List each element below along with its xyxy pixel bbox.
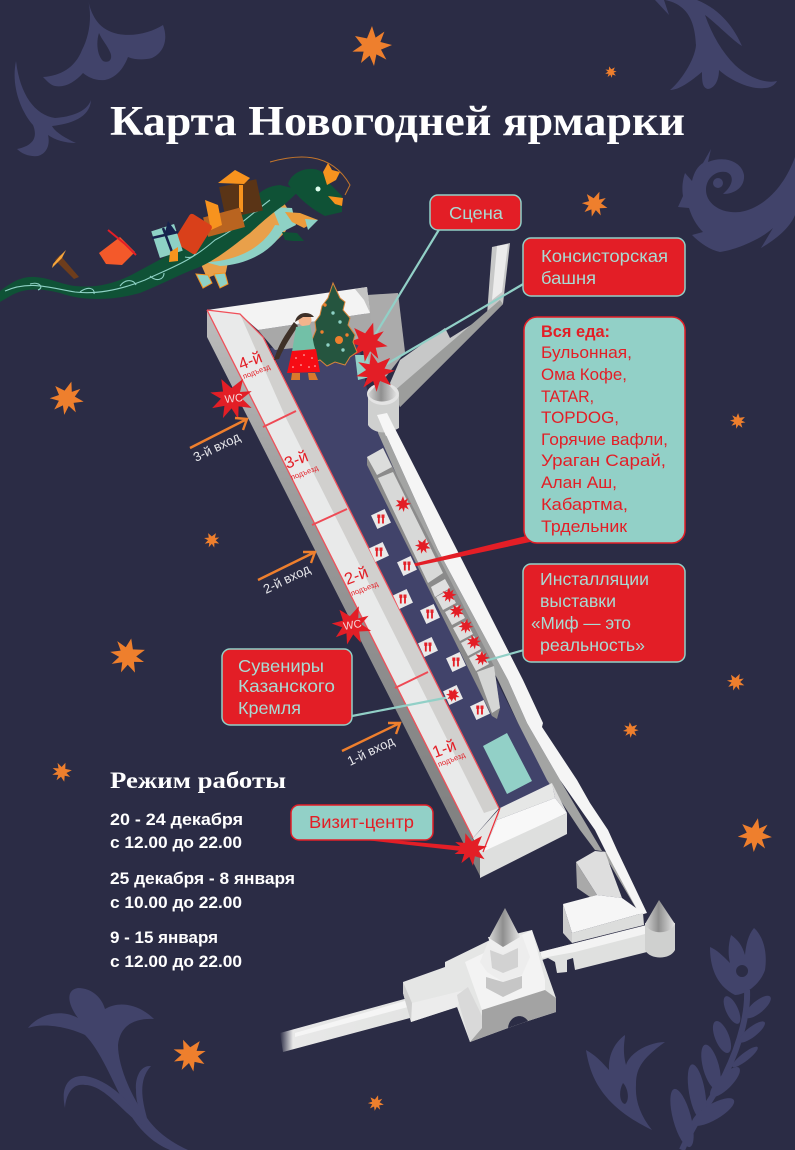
opening hours: 20 - 24 декабря (110, 811, 243, 829)
callout: installations: «Миф — это (531, 613, 631, 633)
gallery entrance labels: 1-й (430, 736, 459, 762)
gallery entrance labels: подъезд (349, 579, 380, 598)
callout: all food: Трдельник (541, 517, 628, 536)
gifts on dragon's back (151, 170, 263, 262)
south wall (540, 925, 647, 973)
food tiles (369, 509, 490, 720)
callout: souvenirs (222, 649, 352, 725)
girl (274, 313, 320, 380)
main east wall (377, 413, 647, 915)
gallery entrance labels: 3-й (282, 447, 311, 473)
callout: consistory tower (523, 238, 685, 296)
tail ornament lines (5, 200, 270, 294)
callout: consistory tower: башня (541, 268, 596, 288)
south block (473, 783, 567, 878)
christmas tree (312, 283, 357, 366)
gallery entrance labels: подъезд (241, 362, 272, 381)
callout: all food: Горячие вафли, (541, 430, 668, 449)
WC labels (224, 392, 363, 633)
ornament: top right (655, 0, 777, 90)
stalls row (367, 448, 500, 719)
title: Карта Новогодней ярмарки (110, 99, 685, 145)
ornament: bottom right tulip branch (666, 928, 774, 1150)
southeast buildings (563, 851, 644, 943)
dragon belly and legs (196, 195, 318, 288)
gift: red box (99, 230, 136, 265)
dragon tail and body (0, 185, 300, 302)
gallery entrance labels: подъезд (289, 463, 320, 482)
callout: visitor center (291, 805, 433, 840)
callout: souvenirs: Кремля (238, 698, 301, 718)
gallery entrance labels (236, 348, 467, 769)
callout: all food: Алан Аш, (541, 473, 617, 492)
callout: installations: Инсталляции (540, 569, 649, 589)
entrance labels (191, 429, 397, 769)
callout: souvenirs: Казанского (238, 676, 335, 696)
callout: installations (523, 564, 685, 662)
entrance labels: 3-й вход (191, 429, 243, 465)
callout: all food: Кабартма, (541, 495, 628, 514)
ornament: top left (15, 0, 165, 156)
callout: consistory tower: Консисторская (541, 246, 668, 266)
callout: stage (430, 195, 521, 230)
callout: stage: Сцена (449, 203, 503, 223)
kremlin map (207, 243, 675, 1052)
callout: all food: Вся еда: (541, 322, 610, 341)
opening hours: 25 декабря - 8 января (110, 870, 295, 888)
callout: souvenirs: Сувениры (238, 656, 324, 676)
callout: all food: TATAR, (541, 387, 594, 406)
southeast tower (645, 900, 675, 958)
entrance labels: 1-й вход (345, 733, 397, 769)
entrance labels: 2-й вход (261, 561, 313, 597)
callout: installations: реальность» (540, 635, 645, 655)
north gallery roof (207, 287, 372, 350)
WC labels: WC (224, 392, 244, 406)
gallery entrance labels: 2-й (342, 563, 371, 589)
callout: all food: Ома Кофе, (541, 365, 627, 384)
callout: all food: Ураган Сарай, (541, 451, 666, 470)
ornament: right swirl (678, 149, 795, 252)
gift: brown box (52, 250, 79, 279)
opening hours: с 12.00 до 22.00 (110, 953, 242, 971)
opening hours: с 12.00 до 22.00 (110, 834, 242, 852)
opening hours: Режим работы (110, 768, 286, 794)
leader lines (348, 228, 530, 852)
gallery entrance labels: 4-й (236, 348, 265, 374)
opening hours: 9 - 15 января (110, 929, 218, 947)
fair plaza (270, 340, 562, 808)
WC labels: WC (342, 618, 363, 633)
dragon with gifts (0, 157, 350, 302)
red stars (202, 318, 495, 873)
spasskaya tower (403, 908, 556, 1042)
north tower (367, 378, 399, 436)
consistory wall (390, 243, 510, 407)
west wall of spasskaya (280, 998, 410, 1052)
opening hours: с 10.00 до 22.00 (110, 894, 242, 912)
callout: installations: выставки (540, 591, 616, 611)
callout: all food (524, 317, 685, 543)
teal zones (483, 733, 532, 794)
west gallery: side wall (207, 310, 481, 878)
ornament: bottom left (28, 988, 188, 1150)
callout: visitor center: Визит-центр (309, 812, 414, 832)
ornament: bottom right sprig (586, 1035, 665, 1130)
callout: all food: Бульонная, (541, 343, 632, 362)
gallery entrance labels: подъезд (436, 750, 467, 769)
west gallery roof (207, 310, 499, 838)
dragon head with crown (270, 157, 350, 216)
opening hours (110, 768, 295, 971)
callout: all food: TOPDOG, (541, 408, 619, 427)
entrance arrows (190, 418, 400, 751)
building behind the stage (362, 293, 405, 378)
